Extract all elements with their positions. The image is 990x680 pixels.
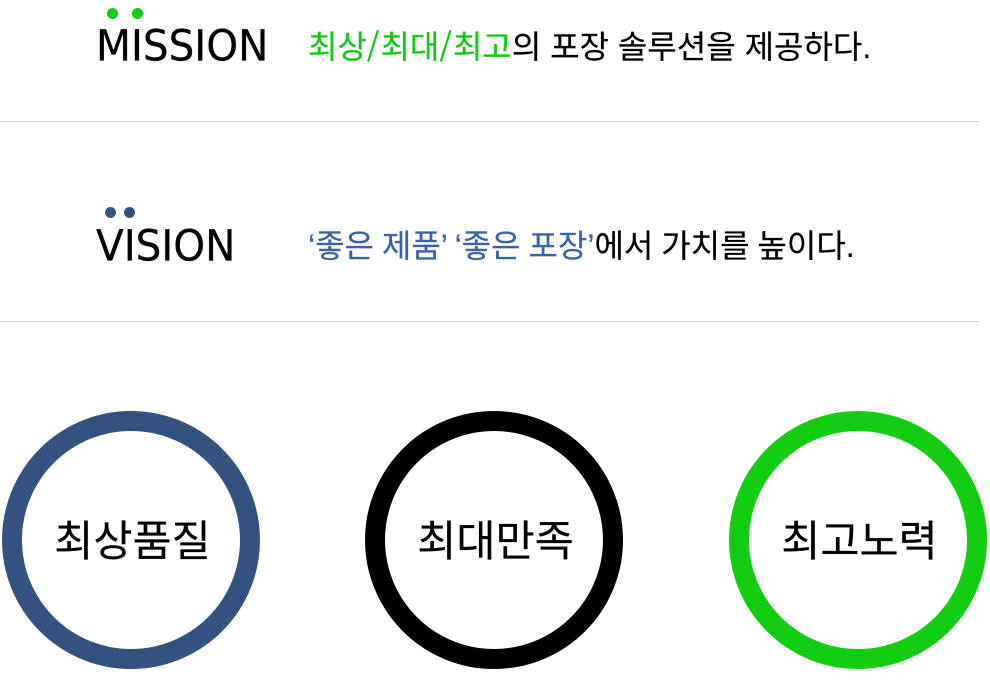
vision heading: VISION — [96, 221, 235, 271]
circle: 최고노력 — [729, 411, 987, 669]
circle: 최상품질 — [2, 411, 260, 669]
mission statement: 최상/최대/최고의 포장 솔루션을 제공하다. — [308, 22, 871, 68]
circle: 최대만족: 최대만족 — [417, 519, 574, 566]
circle: 최상품질: 최상품질 — [54, 519, 211, 566]
circle: 최고노력: 최고노력 — [781, 519, 938, 566]
vision statement: ‘좋은 제품’ ‘좋은 포장’에서 가치를 높이다. — [308, 228, 855, 264]
circle: 최대만족 — [365, 411, 623, 669]
mission heading: MISSION — [96, 21, 268, 71]
